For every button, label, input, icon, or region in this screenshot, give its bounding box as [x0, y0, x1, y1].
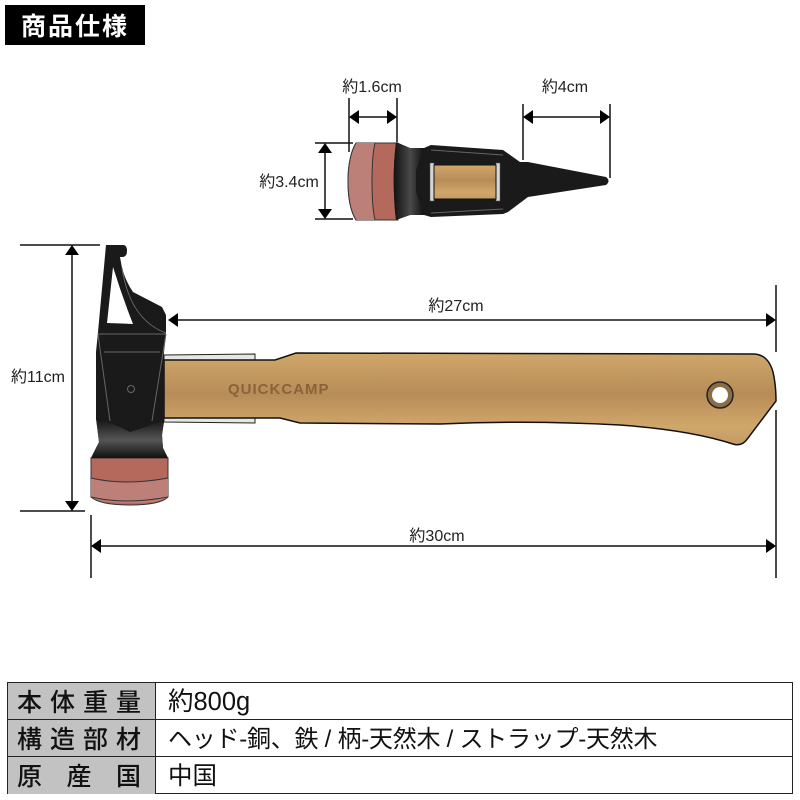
row: materials: 部: [83, 720, 108, 756]
facet lines: [98, 268, 166, 421]
wood handle: [164, 353, 776, 445]
wood insert, top view: [434, 165, 496, 199]
dimension labels: 約1.6cm: [342, 78, 402, 96]
dimension labels: 約30cm: [409, 527, 465, 545]
dimension lines: [20, 98, 776, 578]
dimension labels: 約11cm: [11, 368, 65, 386]
spec table: [7, 682, 793, 794]
steel brackets, top view: [430, 163, 500, 201]
row: materials: 構: [17, 720, 42, 756]
row: origin: [8, 757, 217, 794]
row: weight: 量: [116, 683, 141, 719]
top view hammer head: [348, 142, 608, 220]
lanyard hole: [707, 382, 733, 408]
row: origin: 原: [17, 757, 42, 793]
row: materials: [8, 720, 792, 757]
steel body and claw: [91, 245, 168, 458]
dimension labels: 約3.4cm: [259, 173, 319, 191]
main hammer handle: [164, 353, 776, 445]
row: weight: 本: [17, 683, 42, 719]
row: materials: ヘッド-銅、鉄 / 柄-天然木 / ストラップ-天然木: [168, 726, 657, 753]
title: [5, 5, 145, 45]
row: origin: 産: [66, 757, 92, 793]
title: 商品仕様: [21, 7, 129, 43]
dimension labels: 約4cm: [542, 78, 588, 96]
steel straps: [164, 354, 255, 423]
row: weight: 重: [83, 683, 108, 719]
copper face, top view: [348, 143, 398, 220]
steel body, top view: [394, 142, 608, 220]
row: materials: 材: [116, 720, 141, 756]
dimension labels: 約27cm: [428, 297, 484, 315]
copper face: [91, 458, 168, 505]
row: weight: 体: [50, 683, 75, 719]
brand mark: QUICKCAMP: [228, 381, 330, 398]
row: materials: 造: [50, 720, 75, 756]
row: weight: [8, 683, 792, 720]
row: origin: 中国: [168, 763, 217, 790]
main hammer head: [91, 245, 168, 505]
neck shading: [91, 418, 168, 458]
rivet: [128, 386, 134, 392]
row: weight: 約800g: [168, 688, 250, 716]
dimension labels: [11, 78, 588, 545]
row: origin: 国: [116, 757, 141, 793]
